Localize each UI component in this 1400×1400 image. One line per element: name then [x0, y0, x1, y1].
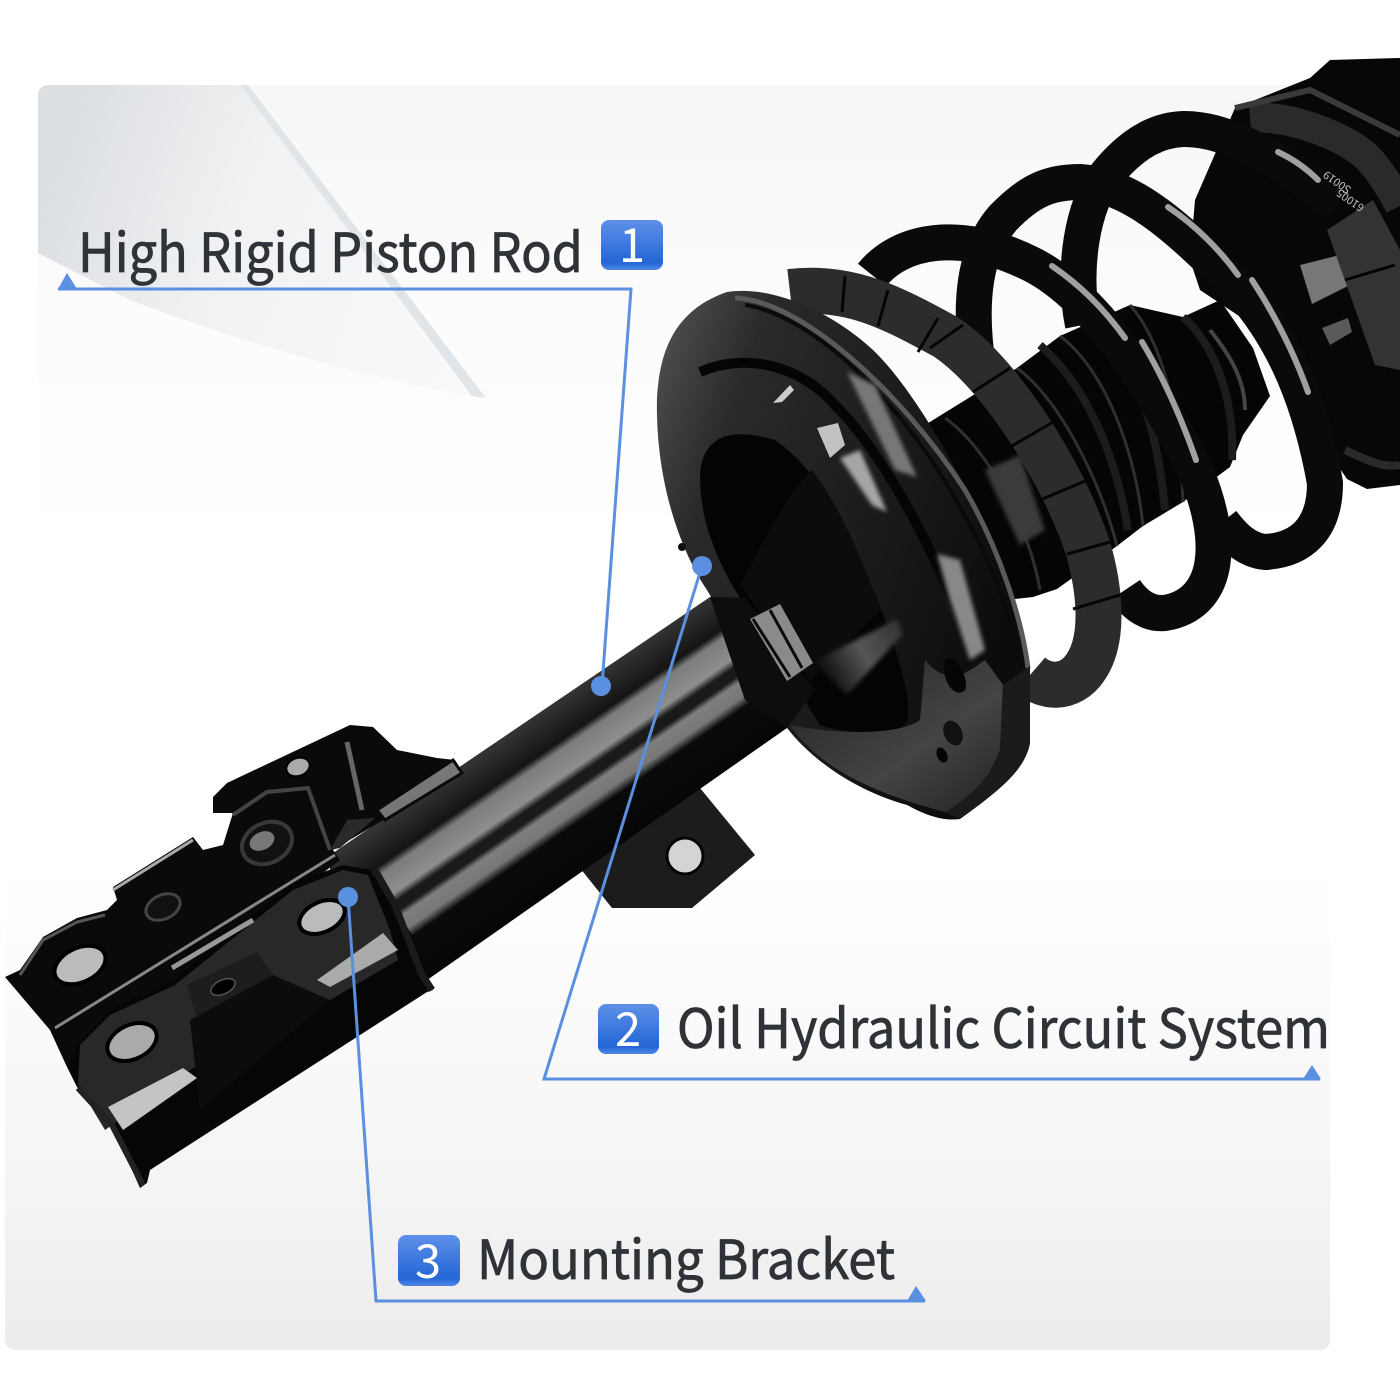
leader line 1: [58, 273, 631, 696]
spring coil 1: [872, 242, 1214, 613]
lower knuckle bracket: [67, 865, 433, 1188]
badge 2: [598, 991, 659, 1060]
dust boot bellows: [925, 300, 1270, 600]
spring seat plate: [657, 291, 1030, 820]
upper knuckle bracket: [5, 725, 462, 1067]
badge 1: [601, 207, 663, 276]
callout 3: Mounting Bracket: [338, 887, 926, 1301]
label 2 text: Oil Hydraulic Circuit System: [677, 985, 1330, 1064]
spring coil 2: [974, 182, 1325, 552]
spring part number: [1320, 167, 1367, 216]
badge 3: [398, 1223, 460, 1292]
leader line 2: [544, 556, 1321, 1079]
sleeved bottom coil: [790, 276, 1120, 685]
badge 3: 3: [415, 1223, 441, 1292]
spring part number: S0019: [1320, 167, 1354, 198]
badge 1: 1: [619, 207, 645, 276]
spring part number: 61005: [1333, 185, 1367, 216]
label 1 text: High Rigid Piston Rod: [78, 209, 583, 288]
leader line 3: [338, 887, 926, 1301]
top mount: [1190, 58, 1400, 489]
badge 2: 2: [615, 991, 641, 1060]
rear bracket tab: [572, 788, 755, 908]
spring coil 3: [1079, 129, 1337, 325]
label 3 text: Mounting Bracket: [477, 1216, 895, 1295]
coil highlights: [1052, 152, 1318, 460]
strut tube: [330, 597, 815, 1048]
callout 2: Oil Hydraulic Circuit System: [544, 556, 1330, 1079]
callout 1: High Rigid Piston Rod: [58, 207, 663, 696]
